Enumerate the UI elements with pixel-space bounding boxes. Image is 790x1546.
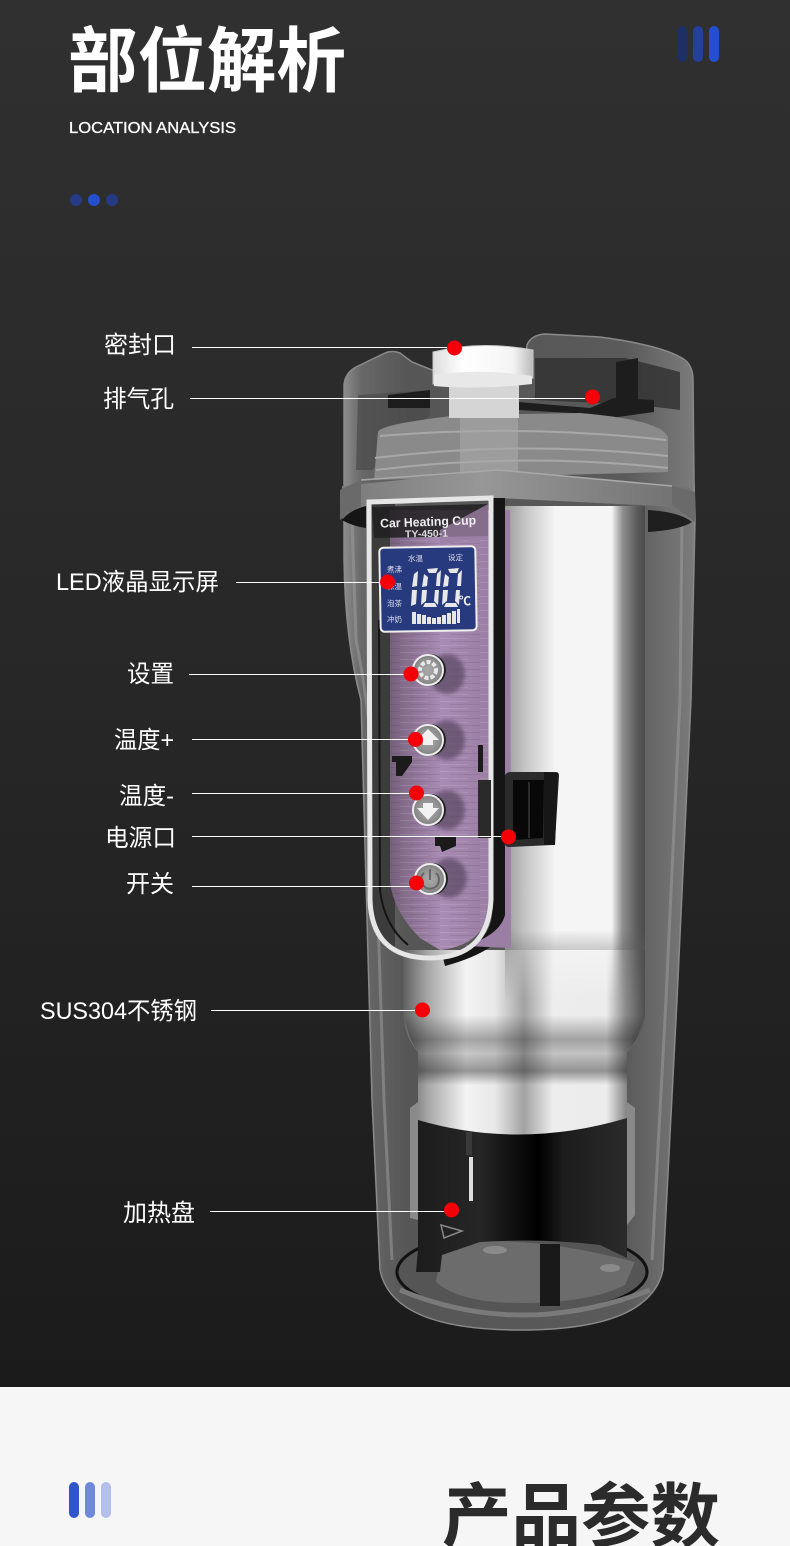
callout: LED液晶显示屏: LED液晶显示屏 <box>56 569 219 596</box>
subtitle: LOCATION ANALYSIS <box>69 120 236 137</box>
callout: LED液晶显示屏 <box>56 569 395 596</box>
callout: 设置: 设置 <box>127 661 174 688</box>
callout: 温度+ <box>114 727 423 754</box>
brushed texture <box>390 510 491 950</box>
callout: 温度+: 温度+ <box>114 727 174 754</box>
LCD display: 冲奶 <box>387 614 402 624</box>
label band <box>372 504 488 538</box>
cup shell <box>344 334 695 1330</box>
callout: SUS304不锈钢 <box>40 998 430 1025</box>
seal stem <box>449 382 519 418</box>
callout: 电源口: 电源口 <box>105 825 176 852</box>
top cavity dark <box>535 358 680 410</box>
level bars <box>412 609 460 624</box>
callout: 加热盘: 加热盘 <box>123 1200 195 1227</box>
steel upper body <box>505 506 645 1000</box>
callout: 开关 <box>126 871 424 898</box>
base outer ring <box>397 1230 647 1314</box>
LCD display: 水温 <box>408 553 423 563</box>
steel neck shade <box>405 1015 643 1085</box>
callout: 电源口 <box>105 825 516 852</box>
dark window frame <box>443 498 505 966</box>
LCD display: 煮沸 <box>387 564 402 574</box>
callout: 排气孔: 排气孔 <box>103 386 174 413</box>
illustration: heating cup <box>340 334 695 1330</box>
callout: 温度- <box>119 783 424 810</box>
digits 100 <box>411 568 462 607</box>
callout: 密封口: 密封口 <box>104 332 176 359</box>
three blue dots <box>70 194 118 206</box>
black heating base <box>416 1118 627 1272</box>
button: temperature down <box>413 790 465 830</box>
button: power <box>415 858 467 898</box>
power port <box>505 772 559 847</box>
degree sign: ℃ <box>459 594 471 608</box>
product name: Car Heating Cup <box>380 513 477 531</box>
base sleeve side <box>410 1102 635 1225</box>
button: temperature up <box>413 720 465 760</box>
button: settings <box>413 654 465 694</box>
model number: TY-450-1 <box>405 529 449 540</box>
three blue bars lower section <box>69 1482 111 1518</box>
seal cap <box>433 345 533 385</box>
purple panel right strip <box>465 510 511 948</box>
three blue bars top right <box>677 26 719 62</box>
light background panel <box>0 1387 790 1546</box>
LCD display <box>379 546 477 632</box>
steel lower section <box>403 950 645 1135</box>
LCD display: 保温 <box>387 582 402 591</box>
purple control panel <box>390 510 491 950</box>
callout: 密封口 <box>104 332 462 359</box>
white window outline <box>369 498 491 958</box>
shell inner highlights <box>352 520 682 1260</box>
title: 部位解析 <box>68 23 346 102</box>
callout: 温度-: 温度- <box>119 783 174 810</box>
lid thread ring <box>374 413 668 480</box>
base plate <box>436 1241 635 1303</box>
window interior <box>369 504 395 950</box>
callout: SUS304不锈钢: SUS304不锈钢 <box>40 998 197 1025</box>
callout: 排气孔 <box>103 386 600 413</box>
LCD display: 泡茶 <box>387 598 402 608</box>
callout: 开关: 开关 <box>126 871 174 898</box>
shell lower rim <box>400 1290 650 1315</box>
LCD display: 设定 <box>448 552 463 562</box>
heater details <box>466 1132 472 1155</box>
internal bracket <box>388 358 654 418</box>
panel clips <box>392 745 483 852</box>
collar <box>340 470 695 520</box>
callout: 加热盘 <box>123 1200 459 1227</box>
callout: 设置 <box>127 661 418 688</box>
